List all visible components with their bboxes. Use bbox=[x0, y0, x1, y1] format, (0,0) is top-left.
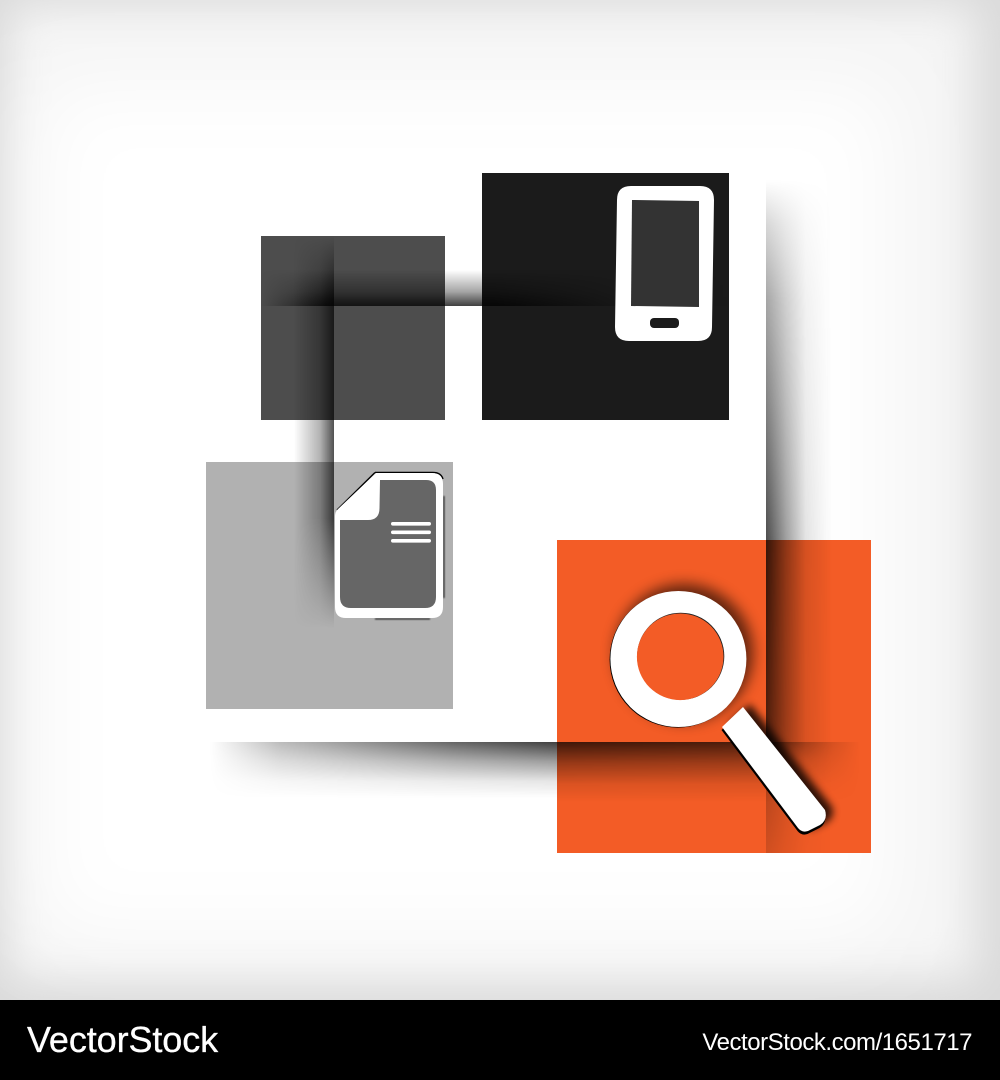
icon: magnifying glass bbox=[610, 584, 833, 835]
logo text: VectorStock bbox=[27, 1019, 218, 1060]
panel: white sheet bbox=[205, 175, 832, 798]
icon: smartphone bbox=[615, 186, 714, 341]
panel: black square bbox=[482, 173, 729, 420]
url text: VectorStock.com/1651717 bbox=[702, 1029, 972, 1056]
footer bar bbox=[0, 1000, 1000, 1080]
panel: dark gray square bbox=[261, 236, 445, 420]
panel: orange square with magnifier bbox=[557, 540, 871, 853]
fold shadow: horizontal bbox=[270, 272, 589, 306]
icon: document bbox=[335, 472, 444, 619]
fold shadow: vertical bbox=[297, 246, 334, 620]
panel: light gray square bbox=[206, 462, 453, 709]
